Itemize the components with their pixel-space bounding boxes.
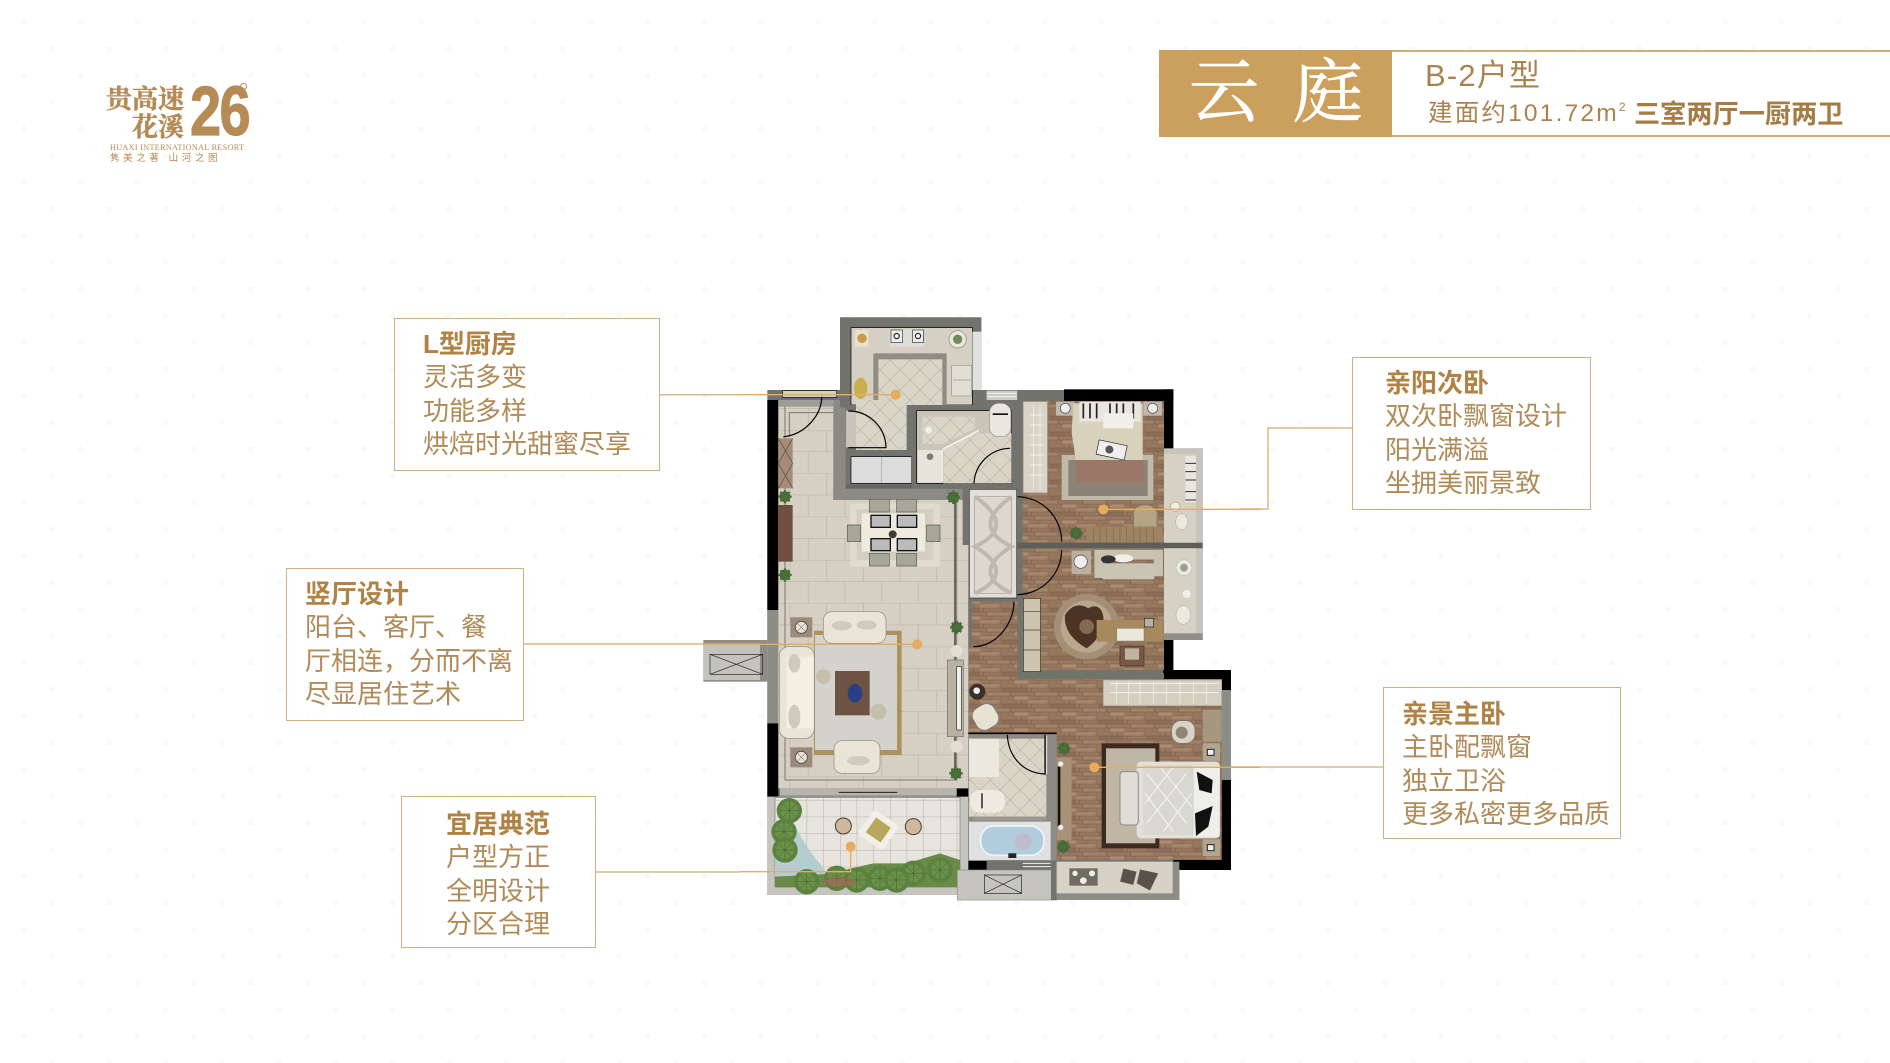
callout text (1385, 401, 1567, 498)
logo name: 贵高速 (106, 85, 184, 114)
room: upper bedroom (1017, 390, 1164, 543)
callout: sunny second bedroom (1352, 357, 1591, 510)
callout: vertical hall (286, 568, 524, 721)
area: 建面约101.72m2 (1428, 100, 1628, 127)
logo slogan: 隽美之著 山河之图 (110, 153, 221, 164)
callout heading: L型厨房 (423, 329, 517, 359)
balcony (767, 788, 968, 895)
callout text: 尽显居住艺术 (305, 679, 461, 709)
gold title block (1159, 50, 1392, 137)
room: kitchen (840, 317, 981, 485)
room: living and dining (778, 391, 968, 788)
room: second bedroom (1017, 543, 1203, 672)
callout text: 户型方正 (446, 842, 550, 872)
entrance hall (963, 488, 1017, 598)
unit type: B-2户型 (1425, 58, 1541, 93)
callout text: 厅相连，分而不离 (305, 646, 513, 676)
callout: L kitchen (394, 318, 660, 471)
room: bathroom one (912, 391, 1023, 488)
callout text: 更多私密更多品质 (1402, 799, 1610, 829)
room: master bathroom (968, 733, 1057, 861)
callout text: 阳光满溢 (1385, 435, 1489, 465)
callout text (446, 842, 550, 939)
master bed (1102, 743, 1220, 856)
callout text: 主卧配飘窗 (1402, 732, 1532, 762)
room: bay windows right (1164, 448, 1203, 640)
logo degree ring (240, 83, 247, 90)
wall base (767, 317, 1231, 900)
callout text: 独立卫浴 (1402, 766, 1506, 796)
callout text: 分区合理 (446, 909, 550, 939)
callout text (1402, 732, 1610, 829)
dining table set (847, 499, 940, 567)
logo (106, 72, 250, 164)
callout text: 烘焙时光甜蜜尽享 (423, 429, 631, 459)
callout text (423, 362, 631, 459)
room configuration: 三室两厅一厨两卫 (1634, 99, 1844, 129)
callout text: 双次卧飘窗设计 (1385, 401, 1567, 431)
marker lines and dots (703, 390, 1260, 872)
project name: 云庭 (1189, 55, 1397, 132)
air conditioner platform (703, 640, 767, 682)
callout text: 全明设计 (446, 876, 550, 906)
callout: master bedroom (1383, 687, 1621, 839)
callout heading: 亲阳次卧 (1385, 368, 1489, 398)
callout heading: 竖厅设计 (305, 579, 409, 609)
living room furniture (779, 612, 963, 780)
callout heading: 亲景主卧 (1402, 699, 1506, 729)
callout text (305, 612, 513, 709)
logo english name: HUAXI INTERNATIONAL RESORT (110, 143, 244, 152)
callout text: 功能多样 (423, 396, 527, 426)
callout text: 坐拥美丽景致 (1385, 468, 1541, 498)
logo name (106, 85, 184, 142)
callout text: 灵活多变 (423, 362, 527, 392)
callout text: 阳台、客厅、餐 (305, 612, 487, 642)
callout heading: 宜居典范 (446, 809, 550, 839)
logo name: 花溪 (132, 113, 184, 142)
logo number 26: 26 (190, 72, 249, 150)
title bar (1159, 50, 1890, 137)
room: corridor and master bedroom (968, 597, 1222, 860)
bottom balconies (957, 861, 1179, 900)
callout: livable model (401, 796, 596, 948)
